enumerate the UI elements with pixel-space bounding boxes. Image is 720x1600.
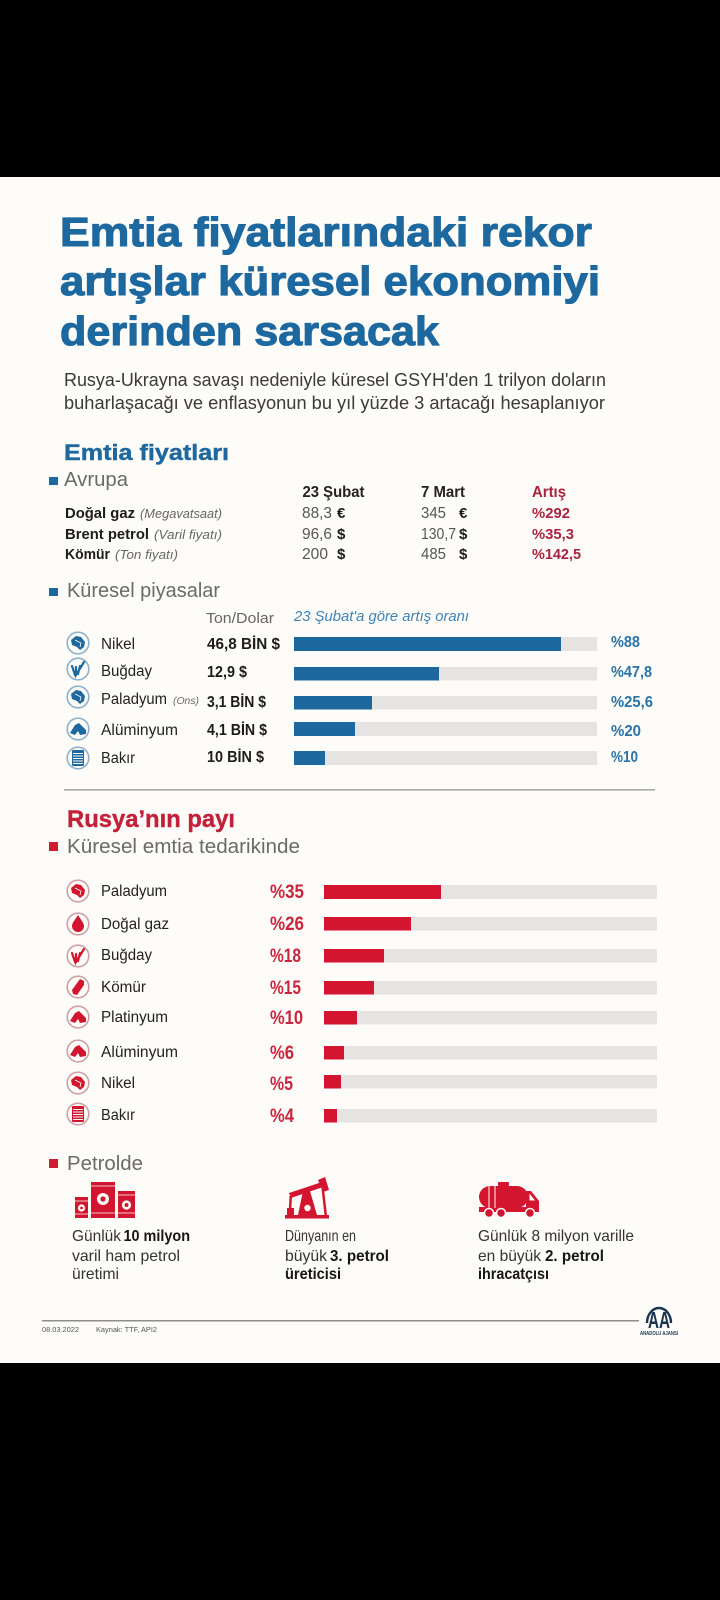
subheading: Küresel emtia tedarikinde: Küresel emtia tedarikinde bbox=[67, 836, 300, 858]
footer: date and source: 08.03.2022 bbox=[42, 1325, 79, 1334]
row: Paladyum: 3,1 BİN $ bbox=[207, 694, 266, 711]
row: Bakır: %10 bbox=[611, 749, 638, 766]
row: Buğday: Buğday bbox=[101, 947, 152, 964]
text: second largest exporter bbox=[478, 1228, 634, 1283]
text: 10 million barrels bbox=[72, 1228, 190, 1283]
column header: increase rate: 23 Şubat'a göre artış oranı bbox=[293, 608, 469, 625]
black top band bbox=[0, 0, 720, 177]
text: second largest exporter: Günlük 8 milyon varille bbox=[478, 1228, 634, 1245]
row: Doğal gaz: %292 bbox=[532, 505, 570, 522]
row: Kömür bbox=[65, 546, 581, 563]
row: Kömür bbox=[67, 976, 657, 999]
row: Brent petrol: $ bbox=[459, 526, 468, 543]
heading: Rusya'nın payı: Rusya’nın payı bbox=[67, 806, 235, 833]
row: Bakır bbox=[67, 1103, 657, 1127]
row: Paladyum: %25,6 bbox=[611, 694, 653, 711]
row: Kömür: %142,5 bbox=[532, 546, 581, 563]
row: Paladyum: Paladyum bbox=[101, 691, 167, 708]
table header: 23 Şubat bbox=[302, 484, 364, 501]
text: third largest producer: üreticisi bbox=[285, 1266, 341, 1283]
row: Paladyum bbox=[67, 686, 653, 711]
row: Doğal gaz: %26 bbox=[270, 914, 304, 935]
row: Buğday: %18 bbox=[270, 946, 301, 967]
row: Nikel: Nikel bbox=[101, 636, 135, 653]
subheading: Petrolde: Petrolde bbox=[67, 1153, 143, 1175]
row: Nikel: %5 bbox=[270, 1074, 293, 1095]
row: Buğday bbox=[67, 658, 652, 681]
row: Brent petrol: (Varil fiyatı) bbox=[154, 528, 222, 542]
panel: infographic background bbox=[0, 177, 720, 1363]
row: Nikel bbox=[67, 632, 640, 654]
row: Brent petrol: Brent petrol bbox=[65, 526, 149, 543]
chart: Rusya share bars bbox=[67, 880, 657, 1127]
footer: date and source bbox=[42, 1325, 157, 1334]
row: Nikel: %88 bbox=[611, 634, 640, 651]
subtitle text block bbox=[64, 369, 606, 413]
row: Kömür: $ bbox=[459, 546, 468, 563]
row: Bakır: 10 BİN $ bbox=[207, 749, 264, 766]
title: Emtia fiyatlarındaki rekor bbox=[60, 209, 592, 255]
subtitle text block: Rusya-Ukrayna savaşı nedeniyle küresel GSYH'den 1 trilyon doların bbox=[64, 369, 606, 390]
text: 10 million barrels: üretimi bbox=[72, 1266, 119, 1283]
row: Brent petrol: 96,6 bbox=[302, 526, 332, 543]
row: Kömür: 200 bbox=[302, 546, 328, 563]
row: Paladyum: (Ons) bbox=[173, 695, 199, 707]
row: Alüminyum: 4,1 BİN $ bbox=[207, 722, 267, 739]
row: Doğal gaz bbox=[65, 505, 570, 522]
text: second largest exporter: ihracatçısı bbox=[478, 1266, 549, 1283]
text: 10 million barrels: 10 milyon bbox=[124, 1228, 190, 1245]
title: artışlar küresel ekonomiyi bbox=[60, 258, 600, 304]
title bbox=[60, 209, 600, 354]
row: Alüminyum bbox=[67, 718, 641, 740]
icon: oil pump bbox=[285, 1177, 329, 1218]
row: Platinyum: %10 bbox=[270, 1008, 303, 1029]
row: Doğal gaz: (Megavatsaat) bbox=[140, 507, 222, 521]
text: third largest producer: 3. petrol bbox=[330, 1248, 389, 1265]
row: Bakır: Bakır bbox=[101, 1107, 135, 1124]
row: Buğday bbox=[67, 945, 657, 967]
row: Brent petrol: 130,7 bbox=[421, 526, 456, 543]
text: third largest producer bbox=[285, 1228, 389, 1283]
row: Doğal gaz: Doğal gaz bbox=[101, 916, 169, 933]
row: Nikel: 46,8 BİN $ bbox=[207, 636, 280, 653]
row: Bakır bbox=[67, 747, 638, 769]
text: second largest exporter: 2. petrol bbox=[545, 1248, 604, 1265]
row: Doğal gaz: € bbox=[459, 505, 468, 522]
row: Nikel: Nikel bbox=[101, 1075, 135, 1092]
row: Nikel bbox=[67, 1072, 657, 1095]
row: Doğal gaz bbox=[67, 913, 657, 935]
row: Doğal gaz: Doğal gaz bbox=[65, 505, 135, 522]
row: Alüminyum: Alüminyum bbox=[101, 722, 178, 739]
row: Kömür: Kömür bbox=[101, 979, 146, 996]
row: Kömür: 485 bbox=[421, 546, 446, 563]
text: second largest exporter: en büyük bbox=[478, 1248, 542, 1265]
text: 10 million barrels: varil ham petrol bbox=[72, 1248, 180, 1265]
row: Buğday: Buğday bbox=[101, 663, 152, 680]
row: Buğday: %47,8 bbox=[611, 664, 652, 681]
subheading: Avrupa: Avrupa bbox=[64, 469, 129, 491]
table header: 7 Mart bbox=[421, 484, 465, 501]
row: Brent petrol bbox=[65, 526, 574, 543]
row: Alüminyum: %6 bbox=[270, 1043, 294, 1064]
row: Platinyum bbox=[67, 1006, 657, 1029]
row: Kömür: %15 bbox=[270, 978, 301, 999]
subheading: Küresel piyasalar: Küresel piyasalar bbox=[67, 580, 220, 602]
row: Platinyum: Platinyum bbox=[101, 1009, 168, 1026]
heading: Emtia fiyatları: Emtia fiyatları bbox=[64, 440, 229, 465]
row: Doğal gaz: 345 bbox=[421, 505, 446, 522]
row: Bakır: %4 bbox=[270, 1106, 294, 1127]
table header: Artış bbox=[532, 484, 566, 501]
black bottom band bbox=[0, 1363, 720, 1600]
row: Kömür: (Ton fiyatı) bbox=[115, 548, 178, 562]
footer: date and source: Kaynak: TTF, API2 bbox=[96, 1325, 157, 1334]
row: Paladyum bbox=[67, 880, 657, 903]
row: Buğday: 12,9 $ bbox=[207, 664, 247, 681]
text: third largest producer: büyük bbox=[285, 1248, 328, 1265]
text: third largest producer: Dünyanın en bbox=[285, 1228, 356, 1245]
row: Alüminyum: %20 bbox=[611, 723, 641, 740]
row: Bakır: Bakır bbox=[101, 750, 135, 767]
icon: tanker truck bbox=[479, 1182, 539, 1218]
icon: oil barrels bbox=[75, 1182, 135, 1218]
title: derinden sarsacak bbox=[60, 308, 439, 354]
text: 10 million barrels: Günlük bbox=[72, 1228, 122, 1245]
row: Alüminyum: Alüminyum bbox=[101, 1044, 178, 1061]
table header bbox=[302, 484, 566, 501]
row: Paladyum: %35 bbox=[270, 882, 304, 903]
row: Kömür: Kömür bbox=[65, 546, 110, 563]
column header: Ton/Dolar: Ton/Dolar bbox=[206, 610, 274, 627]
panel: Avrupa price table bbox=[49, 469, 581, 563]
row: Paladyum: Paladyum bbox=[101, 883, 167, 900]
logo: Anadolu Ajansı bbox=[640, 1307, 678, 1337]
subtitle text block: buharlaşacağı ve enflasyonun bu yıl yüzde 3 artacağı hesaplanıyor bbox=[64, 392, 605, 413]
row: Doğal gaz: € bbox=[337, 505, 346, 522]
row: Brent petrol: $ bbox=[337, 526, 346, 543]
logo: Anadolu Ajansı: AA bbox=[648, 1307, 670, 1333]
logo: Anadolu Ajansı: ANADOLU AJANSI bbox=[640, 1331, 678, 1337]
row: Kömür: $ bbox=[337, 546, 346, 563]
row: Alüminyum bbox=[67, 1040, 657, 1064]
row: Doğal gaz: 88,3 bbox=[302, 505, 332, 522]
chart: Küresel piyasalar bars bbox=[67, 608, 653, 769]
row: Brent petrol: %35,3 bbox=[532, 526, 574, 543]
